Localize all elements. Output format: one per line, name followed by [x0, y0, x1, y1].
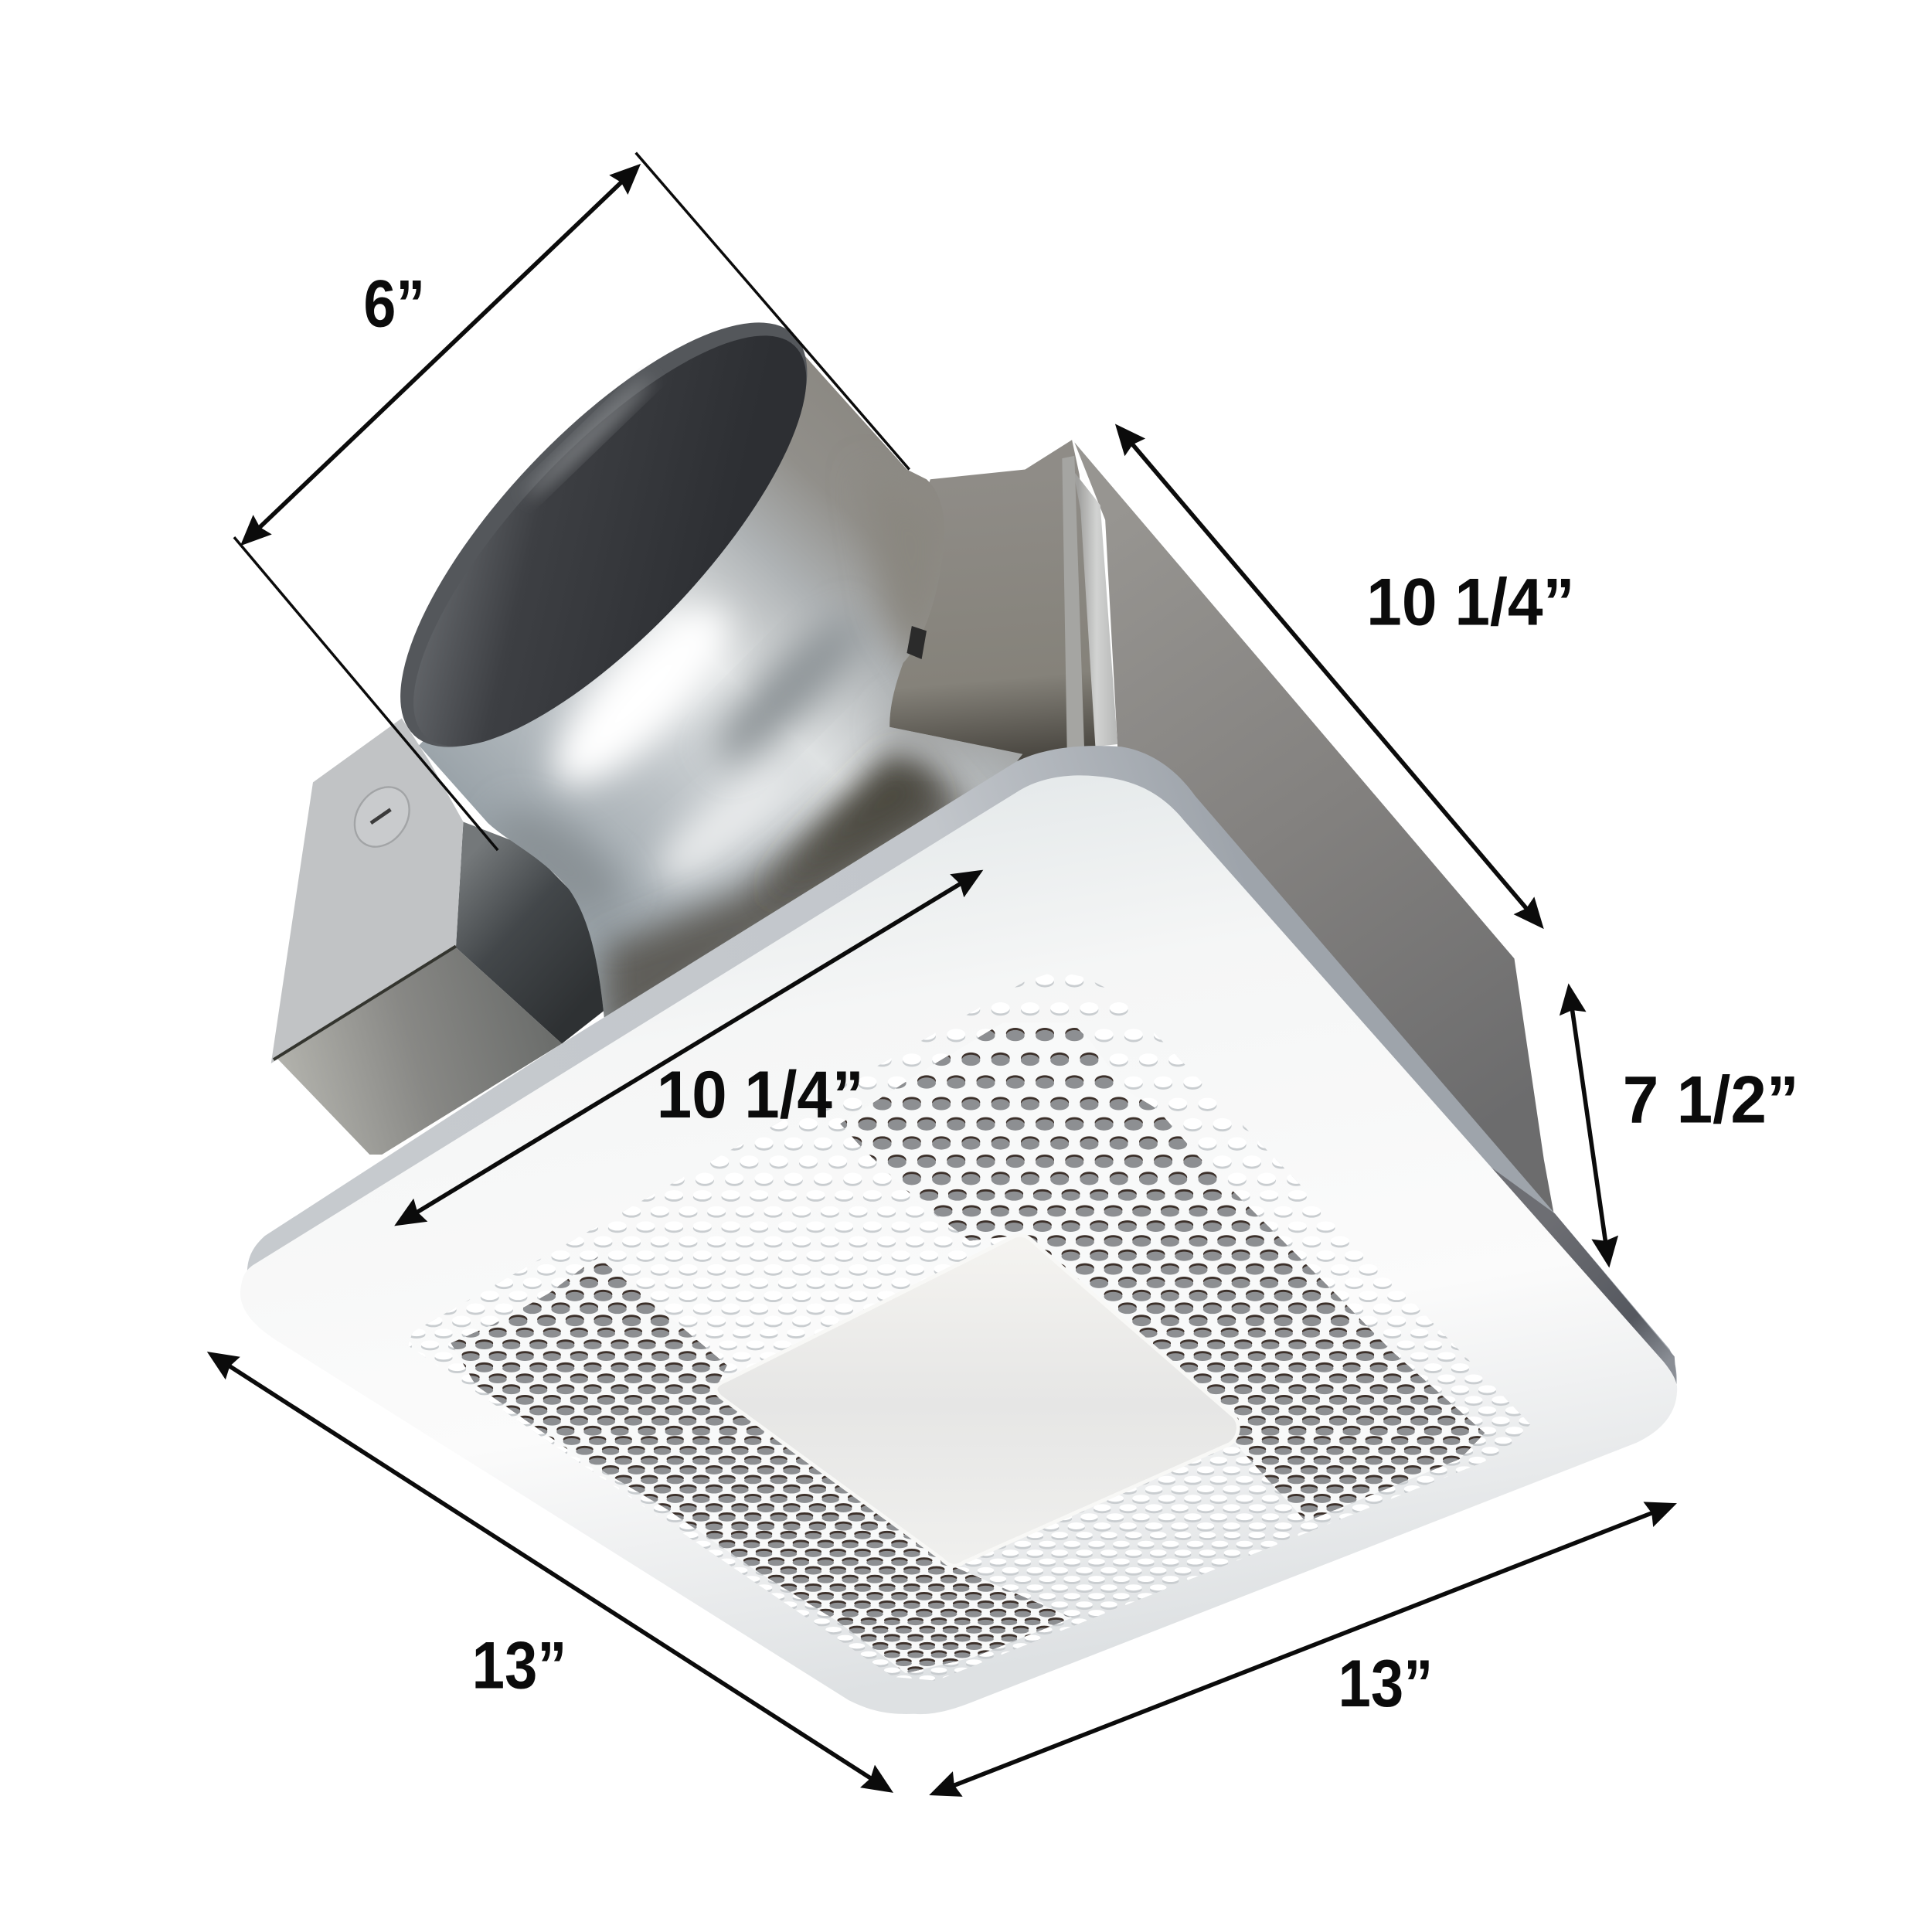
dimension: plate opening 10 1/4 inches [400, 874, 977, 1222]
grille plate rim [247, 746, 1677, 1393]
duct opening [341, 265, 867, 804]
round duct collar [400, 322, 1023, 1017]
dimension: duct diameter 6 inches [234, 153, 910, 850]
icon: knockout circle [343, 777, 420, 857]
dimension: plate width 13 inches right [936, 1506, 1670, 1793]
dimension: housing height 7 1/2 inches: 7 1/2” [1623, 1063, 1799, 1137]
dimension: plate width 13 inches left: 13” [472, 1628, 566, 1702]
junction box [271, 719, 612, 1155]
dimension: plate width 13 inches left [213, 1355, 887, 1789]
fan housing: metal box right face and back panel [862, 440, 1555, 1232]
grille plate [240, 775, 1677, 1714]
perforations: raised dimples [408, 974, 1530, 1680]
dimension: duct diameter 6 inches: 6” [363, 267, 425, 342]
dimension: plate width 13 inches right: 13” [1338, 1647, 1433, 1721]
dimension: housing height 7 1/2 inches [1570, 991, 1799, 1260]
duct tab slot [906, 626, 927, 659]
perforations: open holes [451, 1028, 1485, 1673]
dimension: plate opening 10 1/4 inches: 10 1/4” [657, 1058, 864, 1132]
infographic: ventilation fan with dimensions [207, 151, 1794, 1797]
dimension: housing depth 10 1/4 inches [1120, 430, 1575, 923]
dimension: housing depth 10 1/4 inches: 10 1/4” [1366, 565, 1575, 639]
square light panel [716, 1235, 1238, 1566]
